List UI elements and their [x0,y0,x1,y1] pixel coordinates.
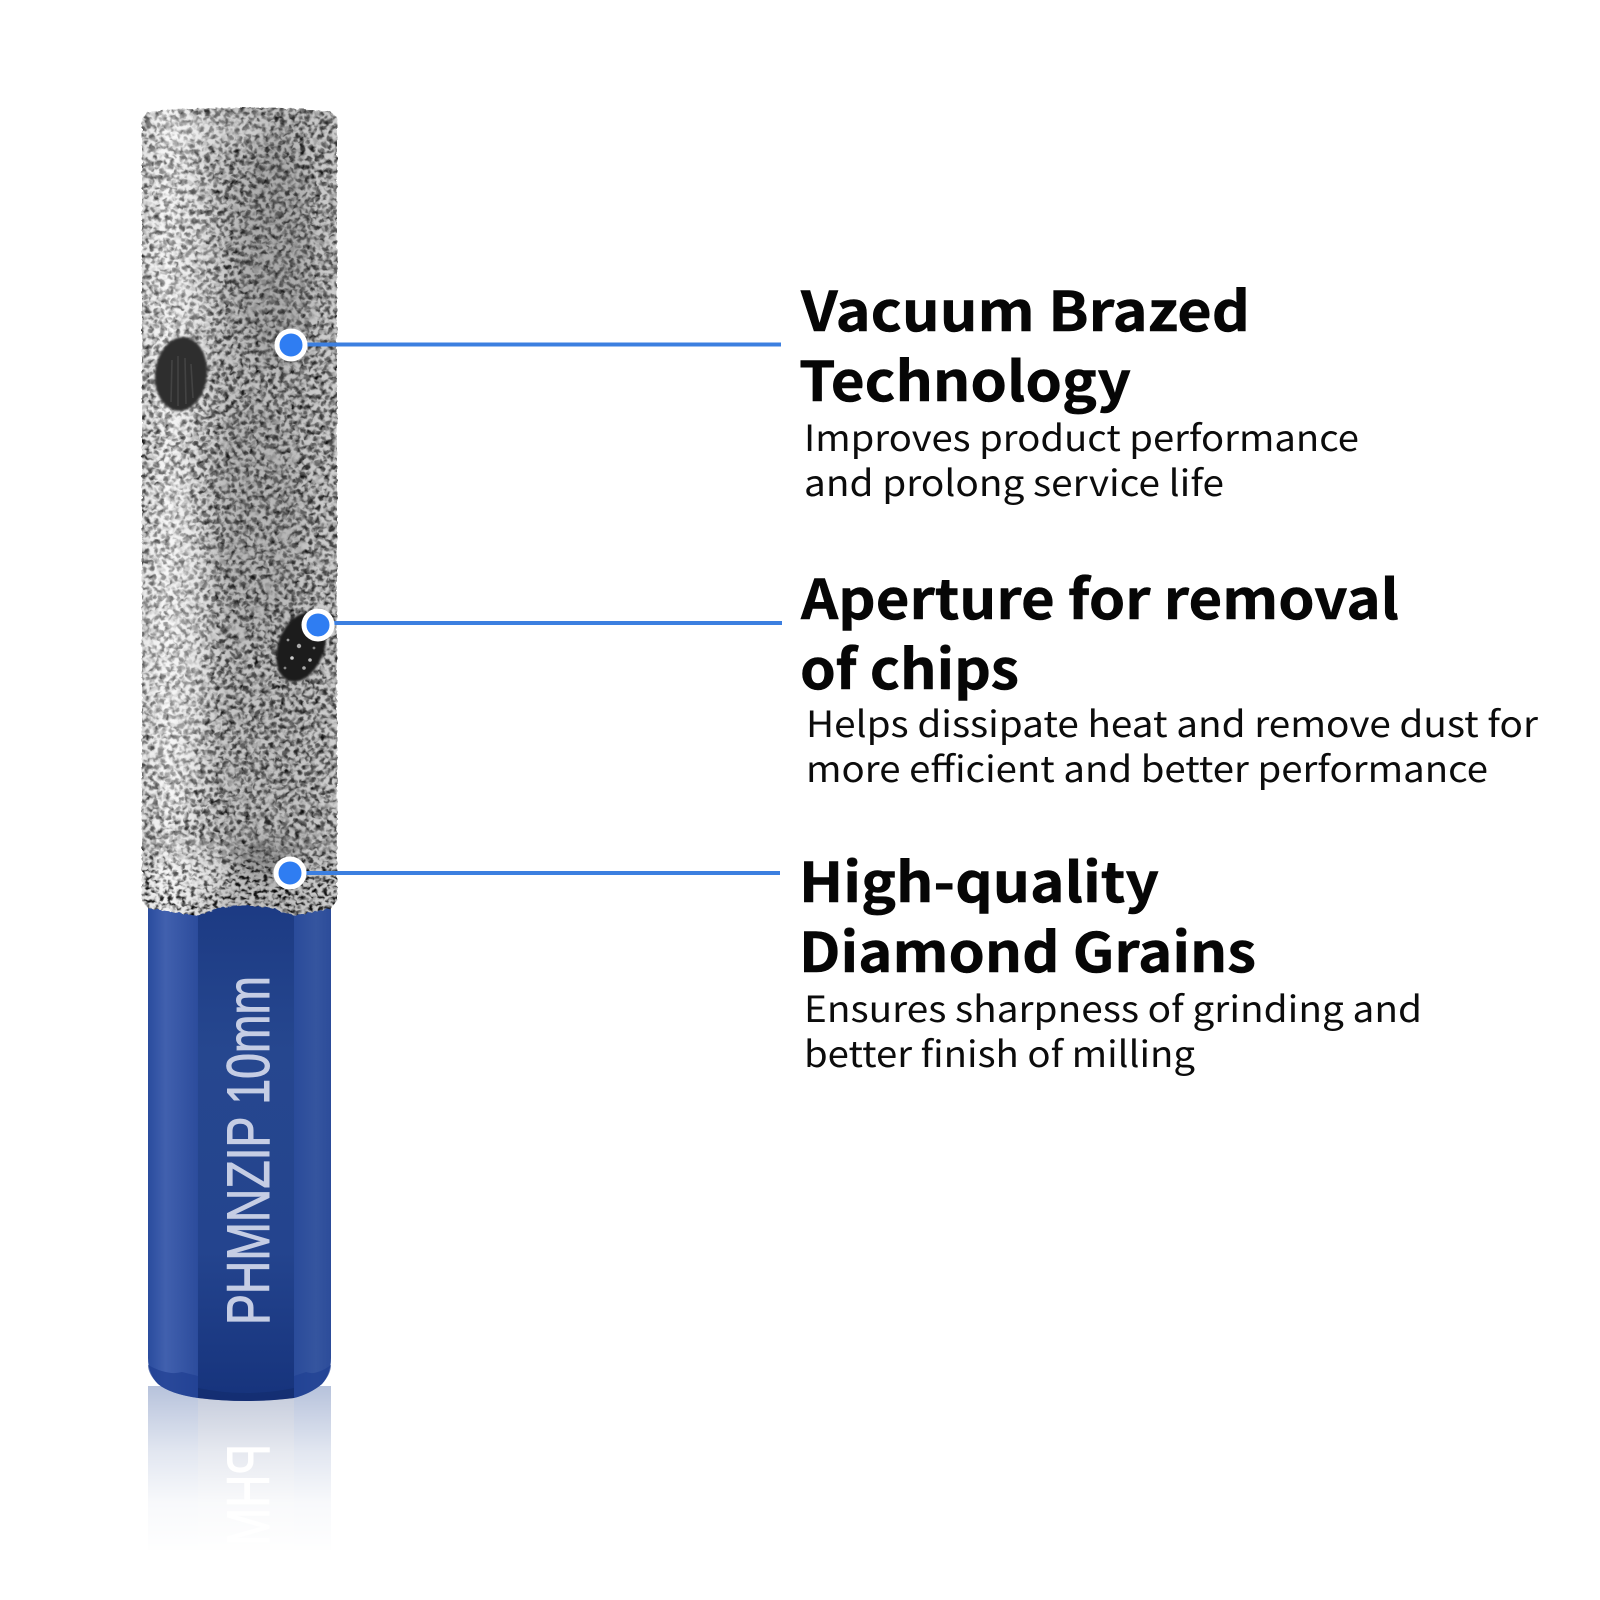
marker dot 2 [304,611,332,639]
marker dot 3 [276,859,304,887]
diamond coated head [140,107,338,916]
description: Ensures sharpness of grinding and [804,981,1422,1033]
reflection of drill bit shank: PHM [215,1444,282,1546]
heading [799,268,1250,417]
description: Helps dissipate heat and remove dust for [806,696,1539,748]
brand text on shank: PHMNZIP 10mm [215,976,282,1325]
blue hex shank [148,900,331,1401]
description: more efficient and better performance [806,741,1488,793]
feature block: aperture for removal of chips [800,556,1539,793]
chip removal hole lower [267,605,335,689]
heading: Vacuum Brazed [800,268,1250,347]
leader line 1 [277,331,781,359]
heading [800,556,1399,705]
leader line 3 [276,859,780,887]
feature block: vacuum brazed technology [799,268,1359,507]
leader line 2 [304,611,782,639]
heading: High-quality [799,839,1159,918]
description: and prolong service life [804,455,1224,507]
drill bit [140,107,338,1401]
feature block: high-quality diamond grains [799,839,1422,1078]
description [804,981,1422,1078]
description [804,410,1359,507]
marker dot 1 [277,331,305,359]
description: Improves product performance [804,410,1359,462]
heading: of chips [800,626,1019,705]
heading: Diamond Grains [799,909,1256,988]
reflection of drill bit shank [146,1386,333,1552]
heading: Aperture for removal [800,556,1399,635]
heading [799,839,1256,988]
chip removal hole upper [151,334,211,414]
heading: Technology [799,338,1131,417]
description [806,696,1539,793]
description: better finish of milling [804,1026,1195,1078]
